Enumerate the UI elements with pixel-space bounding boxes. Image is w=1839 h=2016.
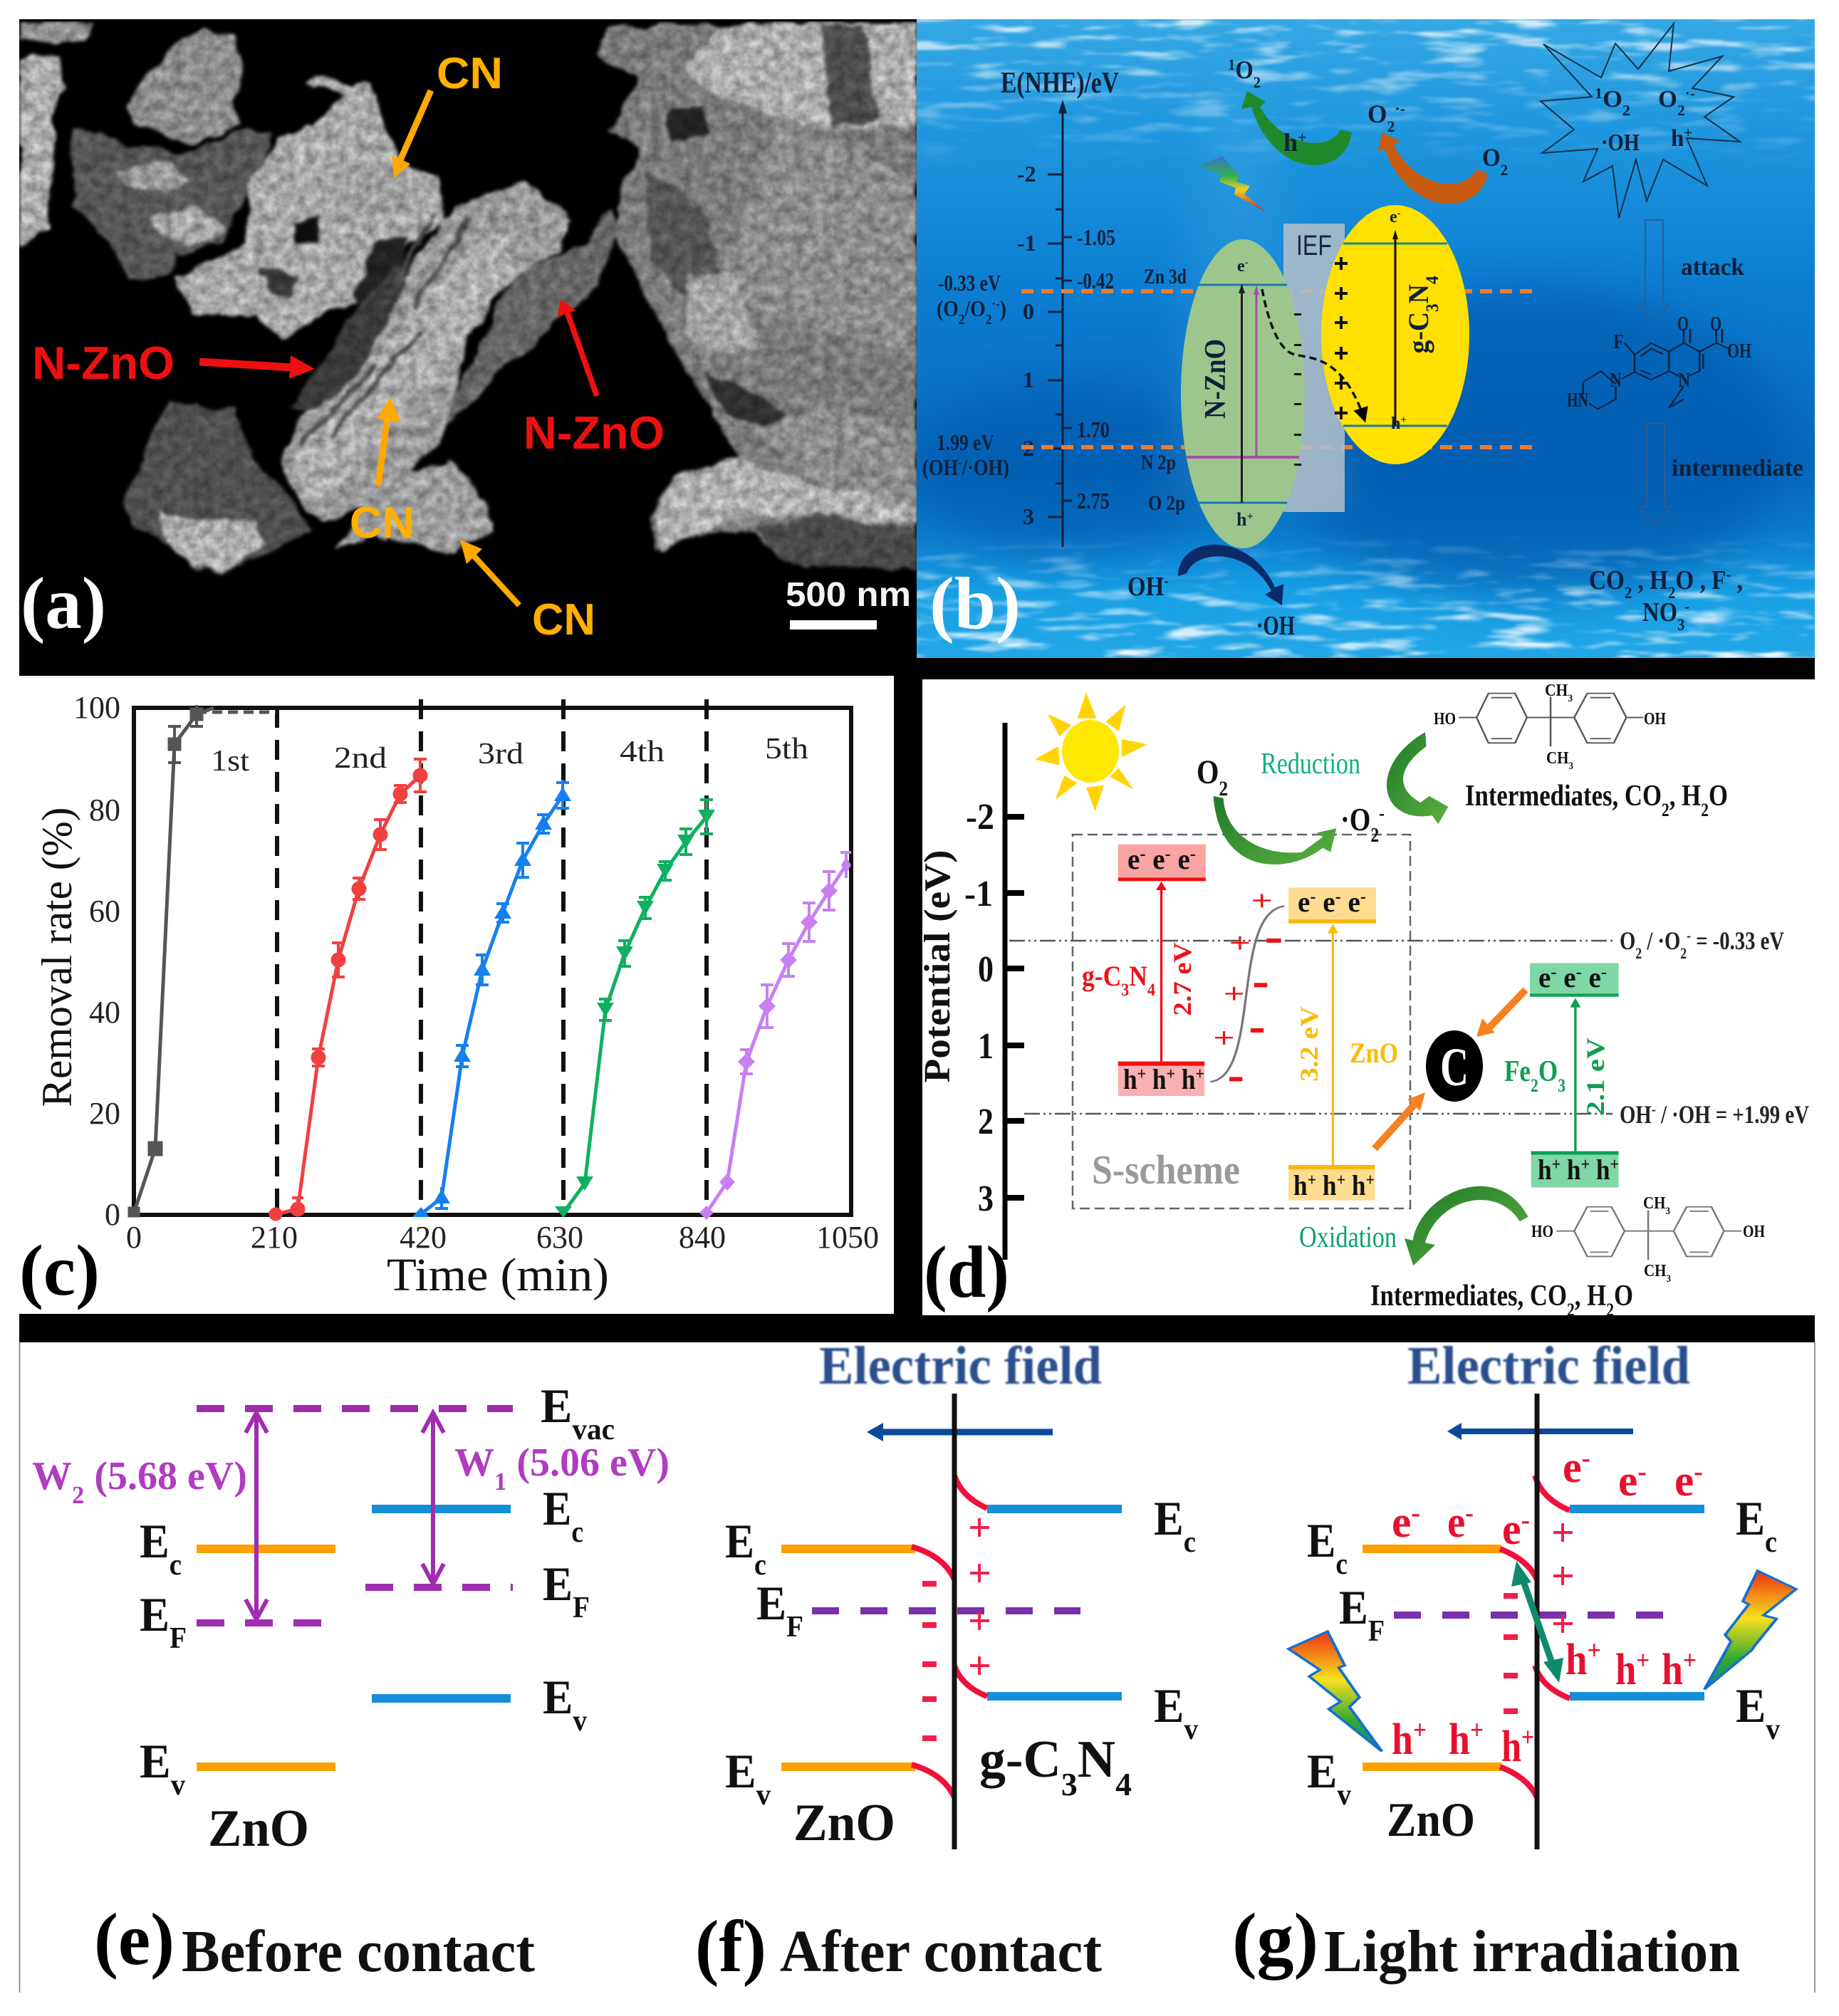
y axis values: 0 (105, 1197, 120, 1232)
IEF box (1283, 224, 1345, 512)
scale bar: 500 nm (786, 576, 911, 630)
g-C3N4 bands: e- e- e- (1127, 843, 1196, 875)
level labels: EF (140, 1587, 187, 1655)
electrons: e- (1502, 1505, 1530, 1554)
molecule: ciprofloxacin: HN (1567, 390, 1588, 412)
g-C3N4 bands (372, 1509, 511, 1698)
arrow: N-ZnO right (557, 299, 597, 396)
caption: (g): (g) (1232, 1899, 1318, 1980)
panel a: SEM micrograph (19, 21, 917, 655)
panel e: before contact (32, 1379, 670, 1985)
cycle dividers (277, 699, 707, 1215)
potential labels: O2 / ·O2- = -0.33 eV (1620, 926, 1784, 961)
charges (1504, 1523, 1573, 1711)
N-ZnO ellipse: h+ (1236, 509, 1254, 530)
axis values: 3 (1023, 503, 1034, 529)
series: 2nd cycle (269, 759, 427, 1221)
text: products bottom: Intermediates, CO2, H2O (1370, 1280, 1633, 1320)
level labels: N 2p (1141, 451, 1176, 474)
molecule: ciprofloxacin: O (1677, 313, 1689, 335)
N-ZnO ellipse: N-ZnO (1199, 339, 1232, 419)
level labels: EF (1339, 1580, 1385, 1648)
level labels: Ec (140, 1514, 182, 1581)
interface charge curve (1210, 894, 1284, 1082)
arrows: orange to carbon (1375, 990, 1526, 1149)
arrow: N-ZnO left (199, 355, 315, 379)
starburst of reactive species: 1O2 (1595, 85, 1630, 119)
level labels: Ev (725, 1744, 771, 1812)
molecule: ciprofloxacin (1567, 313, 1751, 412)
electrons: e- (1563, 1443, 1590, 1492)
reference potentials: 1.99 eV (937, 429, 994, 455)
caption: Light irradiation: Light irradiation (1324, 1918, 1740, 1985)
plot frame (134, 708, 851, 1215)
level labels: Zn 3d (1144, 265, 1187, 288)
charges (922, 1518, 989, 1738)
axis values: -2 (1017, 161, 1036, 187)
reference potentials: (OH-/·OH) (922, 454, 1009, 480)
starburst of reactive species (1541, 23, 1740, 218)
reference potentials: (O2/O2·-) (937, 296, 1006, 328)
g-C3N4 ellipse: h+ (1391, 414, 1407, 433)
axis values (964, 797, 994, 1219)
electrons: e- (1674, 1457, 1703, 1505)
axis values: 3 (978, 1179, 994, 1219)
g-C3N4 bands: h+ h+ h+ (1123, 1063, 1204, 1095)
panel tag (b): (b) (929, 563, 1021, 644)
cycle labels: 5th (765, 733, 808, 766)
level labels: O 2p (1148, 491, 1185, 515)
axis values: 0 (1023, 298, 1034, 324)
molecule: BPA top: HO (1434, 710, 1456, 728)
axis values: -1 (964, 874, 993, 914)
label: attack: attack (1681, 254, 1744, 281)
arrow: CN bottom (460, 540, 519, 605)
level labels: EF (543, 1557, 590, 1624)
axis values: -0.42 (1077, 268, 1114, 293)
products: NO3- (1642, 597, 1689, 634)
species: O2: O2 (1482, 143, 1508, 178)
axis values: 0 (978, 949, 994, 990)
g-C3N4 ellipse (1321, 205, 1469, 464)
ZnO bands (1288, 886, 1398, 1201)
electrons: e- (1618, 1457, 1647, 1505)
series: 1st cycle (128, 705, 276, 1217)
arrow: field direction (867, 1423, 1053, 1441)
arrow: top product (1387, 732, 1448, 824)
arrow: W1 (422, 1413, 444, 1584)
level labels (1141, 265, 1187, 515)
heading: Electric field: Electric field (819, 1336, 1102, 1396)
black backing (19, 19, 1815, 1342)
label: g-C3N4: g-C3N4 (979, 1730, 1132, 1802)
molecule: ciprofloxacin: N (1678, 370, 1690, 392)
level labels: Ec (1307, 1513, 1348, 1581)
molecule: BPA top: CH3 (1545, 681, 1573, 704)
y axis values: 100 (73, 690, 120, 725)
molecule: BPA bottom: CH3 (1643, 1194, 1670, 1217)
y axis title: Removal rate (%) (33, 808, 80, 1107)
label: Reduction: Reduction (1261, 748, 1360, 780)
molecule: BPA bottom: OH (1743, 1223, 1765, 1241)
label: CN top: CN (437, 49, 503, 98)
arrow: field direction (1447, 1423, 1633, 1440)
holes: h+ (1566, 1636, 1601, 1684)
holes (1392, 1636, 1697, 1771)
g-C3N4 bands: 2.7 eV (1168, 943, 1197, 1015)
y axis values (73, 690, 120, 1232)
axis values: -2 (966, 797, 994, 837)
label: CN bottom: CN (532, 595, 595, 644)
series: 5th cycle (699, 852, 851, 1220)
ZnO bands (197, 1549, 335, 1767)
carbon mediator (1426, 1030, 1483, 1102)
g-C3N4 bands: g-C3N4 (1082, 960, 1155, 1000)
molecule: ciprofloxacin: OH (1727, 340, 1751, 362)
arrow: CN centre (377, 397, 401, 486)
starburst of reactive species: O2·- (1658, 85, 1695, 119)
arrow: green h+ (1241, 91, 1352, 165)
level labels: Ev (140, 1734, 186, 1802)
x axis values: 210 (251, 1220, 298, 1255)
x axis values: 840 (679, 1220, 726, 1255)
label: N-ZnO left: N-ZnO (32, 337, 174, 389)
arrow: CN top (392, 90, 431, 178)
ZnO bands: h+ h+ h+ (1293, 1169, 1375, 1201)
band bending (1500, 1476, 1570, 1797)
reference potentials: -0.33 eV (938, 270, 1001, 296)
label: S-scheme: S-scheme (1092, 1147, 1240, 1193)
scale bar: 500 nm: 500 nm (786, 576, 911, 614)
x axis title: Time (min) (387, 1249, 609, 1301)
starburst of reactive species: ·OH (1601, 130, 1640, 156)
level labels: Ec (1154, 1491, 1196, 1558)
band bending (912, 1476, 987, 1797)
caption: (f): (f) (695, 1906, 766, 1988)
holes: h+ (1392, 1715, 1427, 1764)
panel tag (c): (c) (19, 1231, 100, 1311)
products: CO2 , H2O , F- , (1589, 565, 1743, 602)
molecule: ciprofloxacin: N (1610, 370, 1622, 392)
potential labels (1620, 926, 1809, 1129)
g-C3N4 bands (987, 1509, 1122, 1696)
caption: Before contact: Before contact (182, 1918, 535, 1985)
vacuum and Fermi levels (197, 1409, 513, 1623)
axis values: -1 (1017, 230, 1036, 256)
level labels: Ev (543, 1670, 588, 1738)
molecule: BPA top (1434, 681, 1666, 772)
junction line (952, 1394, 957, 1849)
molecule: BPA bottom: HO (1531, 1223, 1553, 1241)
arrow: orange e- (1378, 132, 1488, 204)
label: Oxidation: Oxidation (1299, 1221, 1397, 1254)
x axis values: 420 (400, 1220, 447, 1255)
holes: h+ (1662, 1646, 1697, 1694)
series: 3rd cycle (412, 780, 571, 1217)
x axis values: 630 (536, 1220, 583, 1255)
holes: h+ (1449, 1715, 1484, 1764)
molecule: ciprofloxacin: O (1710, 313, 1721, 335)
molecule: BPA top: CH3 (1546, 749, 1573, 772)
icon: left lightning (1288, 1631, 1382, 1751)
g-C3N4 ellipse: e- (1390, 208, 1401, 226)
level labels (1307, 1491, 1781, 1812)
label: N-ZnO right: N-ZnO (523, 407, 665, 459)
Fe2O3 bands (1504, 961, 1619, 1188)
label: O2: O2 (1197, 753, 1228, 800)
ZnO bands (1363, 1549, 1501, 1767)
species: O2 superoxide: O2·- (1367, 100, 1405, 135)
y axis values: 60 (89, 894, 120, 929)
cycle labels: 1st (211, 745, 249, 778)
potential axis (1005, 723, 1024, 1260)
Fermi level (1394, 1612, 1663, 1619)
axis title: E(NHE)/eV (1001, 67, 1119, 100)
Fe2O3 bands: Fe2O3 (1504, 1055, 1566, 1095)
axis values: 2 (978, 1102, 994, 1142)
arrow: OH conversion (1178, 545, 1283, 605)
energy axis (1048, 103, 1072, 547)
axis values: 1 (978, 1026, 994, 1067)
holes: h+ (1615, 1646, 1650, 1694)
arrow: charge transfer (1511, 1561, 1563, 1683)
icon: right lightning (1704, 1571, 1796, 1689)
level labels: EF (756, 1576, 803, 1644)
junction line (1534, 1394, 1540, 1849)
Fe2O3 bands: e- e- e- (1538, 961, 1607, 993)
label: OH radical: ·OH (1256, 611, 1295, 641)
label: h+: h+ (1283, 128, 1307, 157)
label: OH-: OH- (1127, 572, 1169, 602)
label: superoxide: ·O2- (1340, 801, 1385, 846)
level labels: Evac (541, 1379, 615, 1446)
axis values: 2 (1023, 435, 1034, 461)
panel f: after contact (695, 1336, 1199, 1988)
y axis values: 20 (89, 1096, 120, 1131)
label: W2: W2 (5.68 eV) (32, 1454, 247, 1508)
holes: h+ (1501, 1723, 1534, 1771)
panel g: light irradiation (1232, 1336, 1796, 1985)
label: ZnO: ZnO (793, 1794, 895, 1852)
label: ZnO: ZnO (1387, 1792, 1475, 1847)
SEM particles (19, 21, 917, 577)
N-ZnO ellipse (1181, 239, 1305, 548)
label: ZnO: ZnO (208, 1800, 309, 1858)
level labels: Ec (1736, 1491, 1777, 1558)
arrow: intermediate (1638, 424, 1672, 526)
level labels (140, 1379, 615, 1802)
g-C3N4 ellipse: g-C3N4 (1402, 276, 1442, 353)
g-C3N4 bands (1570, 1509, 1704, 1696)
panel b: band diagram in water (912, 19, 1815, 658)
x axis values (126, 1220, 879, 1255)
charge signs (1294, 257, 1348, 466)
arrow: W2 (246, 1413, 267, 1619)
level labels: Ec (725, 1514, 766, 1581)
cycle labels: 3rd (478, 738, 523, 771)
ZnO bands: ZnO (1350, 1037, 1398, 1069)
Fe2O3 bands: h+ h+ h+ (1538, 1154, 1619, 1186)
products (1589, 565, 1743, 634)
molecule: BPA bottom: CH3 (1644, 1262, 1671, 1285)
cycle labels (211, 733, 808, 778)
ZnO bands: 3.2 eV (1295, 1006, 1323, 1082)
dashed potential lines (1021, 291, 1538, 447)
arrow: O2 reduction (1214, 796, 1336, 865)
series: 4th cycle (555, 800, 715, 1218)
electron transfer curve (1262, 289, 1365, 420)
axis values: 2.75 (1077, 488, 1110, 513)
heading: Electric field: Electric field (1407, 1336, 1690, 1396)
molecule: BPA bottom (1531, 1194, 1765, 1285)
level labels: Ev (1307, 1744, 1352, 1812)
axis values: 1 (1023, 367, 1034, 392)
axis values: -1.05 (1077, 224, 1115, 250)
label: W1: W1 (5.06 eV) (454, 1441, 670, 1495)
molecule: BPA top: OH (1644, 710, 1666, 728)
starburst of reactive species: h+ (1671, 124, 1692, 152)
ZnO bands (781, 1549, 915, 1767)
carbon mediator: C (1440, 1038, 1469, 1097)
label: CN centre: CN (350, 498, 415, 548)
water background (912, 19, 1815, 658)
cycle labels: 2nd (334, 742, 387, 775)
panel c: cycling chart (19, 676, 894, 1314)
reference potentials (922, 270, 1009, 480)
cycle labels: 4th (620, 736, 665, 768)
x axis values: 0 (126, 1220, 142, 1255)
level labels: Ec (543, 1481, 583, 1548)
Fermi level (812, 1607, 1080, 1614)
level labels (725, 1491, 1199, 1812)
text: products top: Intermediates, CO2, H2O (1465, 780, 1728, 820)
S-scheme dashed box (1073, 835, 1410, 1208)
IEF box: IEF (1296, 230, 1332, 261)
caption: After contact: After contact (780, 1918, 1102, 1985)
axis values: 1.70 (1077, 417, 1110, 442)
icon: sun (1035, 692, 1147, 811)
panel frame lines (20, 1342, 1815, 1993)
panel tag (d): (d) (924, 1231, 1009, 1313)
electrons: e- (1447, 1498, 1474, 1547)
axis title: Potential (eV) (917, 850, 958, 1082)
y axis values: 40 (89, 995, 120, 1030)
arrow: attack (1638, 220, 1670, 322)
icon: light bolt (1199, 156, 1266, 212)
caption: (e): (e) (94, 1899, 174, 1980)
label: intermediate: intermediate (1672, 455, 1803, 481)
level labels: Ev (1736, 1678, 1781, 1746)
arrow: oxidation (1405, 1186, 1528, 1265)
species: 1O2: 1O2 (1228, 56, 1261, 91)
x axis values: 1050 (816, 1220, 879, 1255)
reference lines (1009, 941, 1613, 1114)
electrons: e- (1392, 1498, 1420, 1547)
y axis values: 80 (89, 793, 120, 827)
g-C3N4 bands (1082, 843, 1206, 1096)
Fe2O3 bands: 2.1 eV (1581, 1038, 1610, 1115)
electrons (1392, 1443, 1703, 1554)
axis values (1017, 161, 1115, 529)
panel d: S-scheme diagram (917, 679, 1815, 1320)
molecule: ciprofloxacin: F (1613, 331, 1624, 353)
panel tag (a): (a) (21, 563, 106, 644)
N-ZnO ellipse: e- (1237, 257, 1249, 276)
level labels: Ev (1154, 1678, 1199, 1746)
ZnO bands: e- e- e- (1298, 886, 1366, 918)
